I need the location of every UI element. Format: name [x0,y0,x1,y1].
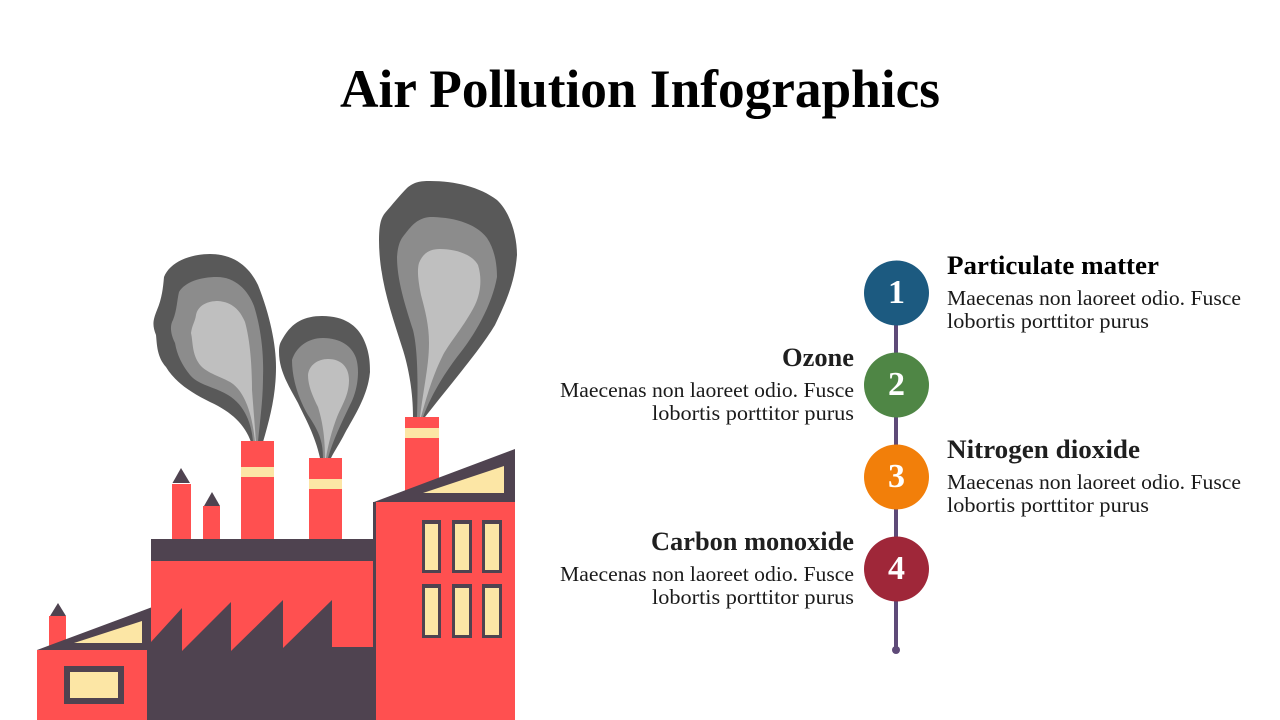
step 4 marker [864,536,929,602]
small chimney: tall [172,468,191,540]
small chimney: short [203,492,220,540]
step 2 marker [864,352,929,418]
chimney with band: middle [309,458,342,540]
step 1 marker: 1 [888,274,905,311]
step 3 marker: 3 [888,458,905,495]
right building [373,449,515,720]
text block: nitrogen dioxide: lobortis porttitor purus [947,493,1149,517]
central hall with sawtooth roof [147,539,376,720]
text block: particulate matter [947,251,1241,333]
text block: carbon monoxide: lobortis porttitor purus [652,585,854,609]
step 2 marker: 2 [888,366,905,403]
small chimney: far left [49,603,66,648]
smoke plume: middle [279,316,370,458]
factory illustration [37,181,517,720]
text block: ozone: Ozone [782,343,854,372]
smoke plume: right [379,181,517,417]
text block: carbon monoxide [560,527,854,609]
step 3 marker [864,444,929,510]
timeline line [892,293,900,654]
chimney with band: right [405,417,439,497]
text block: nitrogen dioxide: Nitrogen dioxide [947,435,1140,464]
text block: carbon monoxide: Carbon monoxide [651,527,854,556]
text block: carbon monoxide: Maecenas non laoreet odio. Fusce [560,562,854,586]
text block: nitrogen dioxide [947,435,1241,517]
smoke plume: left [153,254,276,442]
text block: ozone [560,343,854,425]
text block: particulate matter: Particulate matter [947,251,1159,280]
text block: ozone: Maecenas non laoreet odio. Fusce [560,378,854,402]
text block: ozone: lobortis porttitor purus [652,401,854,425]
text block: nitrogen dioxide: Maecenas non laoreet odio. Fusce [947,470,1241,494]
left building [37,608,151,720]
title: Air Pollution Infographics [340,59,940,119]
text block: particulate matter: Maecenas non laoreet odio. Fusce [947,286,1241,310]
step 4 marker: 4 [888,550,905,587]
text block: particulate matter: lobortis porttitor purus [947,309,1149,333]
step 1 marker [864,260,929,326]
chimney with band: left [241,441,274,540]
